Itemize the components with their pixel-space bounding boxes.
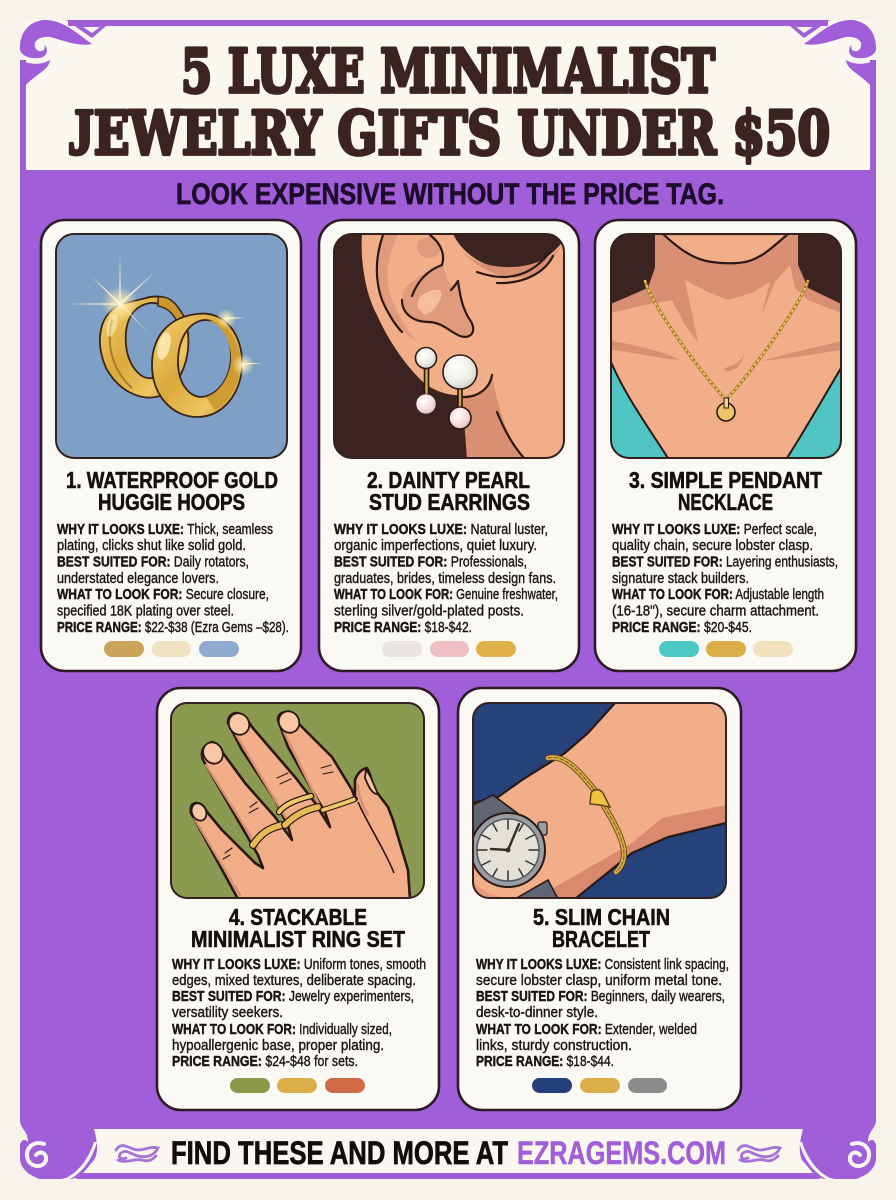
- card 4 details: WHY IT LOOKS LUXE: Uniform tones, smooth: [172, 957, 426, 973]
- illustration: gold huggie hoops: [56, 234, 287, 458]
- subtitle: LOOK EXPENSIVE WITHOUT THE PRICE TAG.: [176, 178, 724, 211]
- card 4 details: versatility seekers.: [172, 1005, 283, 1021]
- card 2 details: WHY IT LOOKS LUXE: Natural luster,: [334, 522, 548, 538]
- panel: card 4 ring set: [157, 688, 439, 1110]
- card 3 details: WHAT TO LOOK FOR: Adjustable length: [612, 587, 824, 603]
- card 4 heading: 4. STACKABLE: [229, 904, 367, 930]
- title: [68, 37, 830, 169]
- footer call to action: EZRAGEMS.COM: [517, 1135, 726, 1171]
- footer call to action: FIND THESE AND MORE AT: [171, 1135, 508, 1171]
- card 5 details: PRICE RANGE: $18-$44.: [476, 1054, 614, 1070]
- card 3 details: (16-18"), secure charm attachment.: [612, 604, 819, 620]
- illustration: wrist with bracelet and watch: [471, 703, 726, 899]
- card 4 details: [172, 957, 426, 1070]
- finger shading: [194, 726, 368, 895]
- hand outline: [191, 712, 410, 899]
- panel: card 1 huggie hoops: [41, 220, 301, 671]
- card 1 heading: [66, 467, 278, 515]
- card 1 details: WHAT TO LOOK FOR: Secure closure,: [57, 587, 269, 603]
- card 1 details: plating, clicks shut like solid gold.: [57, 538, 246, 554]
- footer banner: [83, 1129, 813, 1173]
- card 2 details: graduates, brides, timeless design fans.: [334, 571, 556, 587]
- card 4 colour swatches: [230, 1078, 365, 1093]
- top corner ornaments: [16, 16, 880, 170]
- card 3 details: signature stack builders.: [612, 571, 749, 587]
- card 3 details: [612, 522, 838, 636]
- card 3 heading: [629, 467, 822, 515]
- card 3 colour swatches: [659, 641, 793, 657]
- card 2 details: WHAT TO LOOK FOR: Genuine freshwater,: [334, 587, 558, 603]
- sparkles: [65, 252, 262, 376]
- card 3 details: PRICE RANGE: $20-$45.: [612, 620, 752, 636]
- card 5 details: secure lobster clasp, uniform metal tone.: [476, 973, 722, 989]
- card 2 heading: [367, 467, 530, 515]
- card 5 details: WHY IT LOOKS LUXE: Consistent link spacing,: [476, 957, 729, 973]
- illustration: ear with pearl studs: [334, 234, 564, 458]
- chain and pendant: [645, 280, 808, 421]
- card 5 heading: [533, 904, 670, 952]
- card 5 details: WHAT TO LOOK FOR: Extender, welded: [476, 1022, 697, 1038]
- wristwatch: [471, 795, 558, 899]
- bracelet chain: [548, 757, 624, 872]
- card 3 details: BEST SUITED FOR: Layering enthusiasts,: [612, 554, 838, 570]
- card 5 details: links, sturdy construction.: [476, 1038, 632, 1054]
- card 2 details: organic imperfections, quiet luxury.: [334, 538, 537, 554]
- card 2 details: [334, 522, 558, 636]
- title panel: [26, 26, 870, 170]
- pearls: [416, 348, 477, 429]
- card 1 details: specified 18K plating over steel.: [57, 604, 234, 620]
- card 3 details: WHY IT LOOKS LUXE: Perfect scale,: [612, 522, 817, 538]
- rings: [253, 796, 355, 845]
- bottom corner ornaments: [16, 1122, 880, 1186]
- card 1 details: BEST SUITED FOR: Daily rotators,: [57, 554, 249, 570]
- card 1 heading: HUGGIE HOOPS: [98, 489, 245, 515]
- card 4 details: PRICE RANGE: $24-$48 for sets.: [172, 1054, 358, 1070]
- card 4 heading: [191, 904, 405, 952]
- card 2 heading: 2. DAINTY PEARL: [367, 467, 530, 493]
- card 1 details: understated elegance lovers.: [57, 571, 219, 587]
- card 4 heading: MINIMALIST RING SET: [191, 926, 405, 952]
- card 5 colour swatches: [532, 1078, 667, 1093]
- card 5 heading: BRACELET: [552, 926, 650, 952]
- card 1 details: PRICE RANGE: $22-$38 (Ezra Gems –$28).: [57, 620, 289, 636]
- card 1 details: [57, 522, 289, 636]
- card 3 details: quality chain, secure lobster clasp.: [612, 538, 813, 554]
- card 3 heading: 3. SIMPLE PENDANT: [629, 467, 822, 493]
- footer flourish left: [116, 1146, 158, 1161]
- knuckle creases: [223, 765, 333, 859]
- card 2 details: PRICE RANGE: $18-$42.: [334, 620, 472, 636]
- card 4 details: edges, mixed textures, deliberate spacing.: [172, 973, 416, 989]
- illustration: neck with pendant: [611, 234, 841, 458]
- card 4 details: WHAT TO LOOK FOR: Individually sized,: [172, 1022, 392, 1038]
- card 5 details: desk-to-dinner style.: [476, 1005, 598, 1021]
- title: 5 LUXE MINIMALIST: [181, 37, 715, 107]
- card 1 colour swatches: [104, 641, 239, 657]
- card 2 details: sterling silver/gold-plated posts.: [334, 604, 524, 620]
- card 2 details: BEST SUITED FOR: Professionals,: [334, 554, 527, 570]
- panel: card 2 pearl studs: [319, 220, 579, 671]
- card 5 details: [476, 957, 729, 1070]
- card 5 details: BEST SUITED FOR: Beginners, daily wearers,: [476, 989, 725, 1005]
- footer flourish right: [738, 1146, 780, 1161]
- card 2 heading: STUD EARRINGS: [369, 489, 530, 515]
- card 1 heading: 1. WATERPROOF GOLD: [66, 467, 278, 493]
- card 3 heading: NECKLACE: [678, 489, 773, 515]
- card 4 details: hypoallergenic base, proper plating.: [172, 1038, 384, 1054]
- illustration: hand with stacked rings: [171, 703, 424, 899]
- card 5 heading: 5. SLIM CHAIN: [533, 904, 670, 930]
- panel: card 5 chain bracelet: [458, 688, 741, 1110]
- card 1 details: WHY IT LOOKS LUXE: Thick, seamless: [57, 522, 273, 538]
- panel: card 3 pendant necklace: [595, 220, 856, 671]
- fingernails: [189, 707, 378, 823]
- card 2 colour swatches: [382, 641, 516, 657]
- card 4 details: BEST SUITED FOR: Jewelry experimenters,: [172, 989, 414, 1005]
